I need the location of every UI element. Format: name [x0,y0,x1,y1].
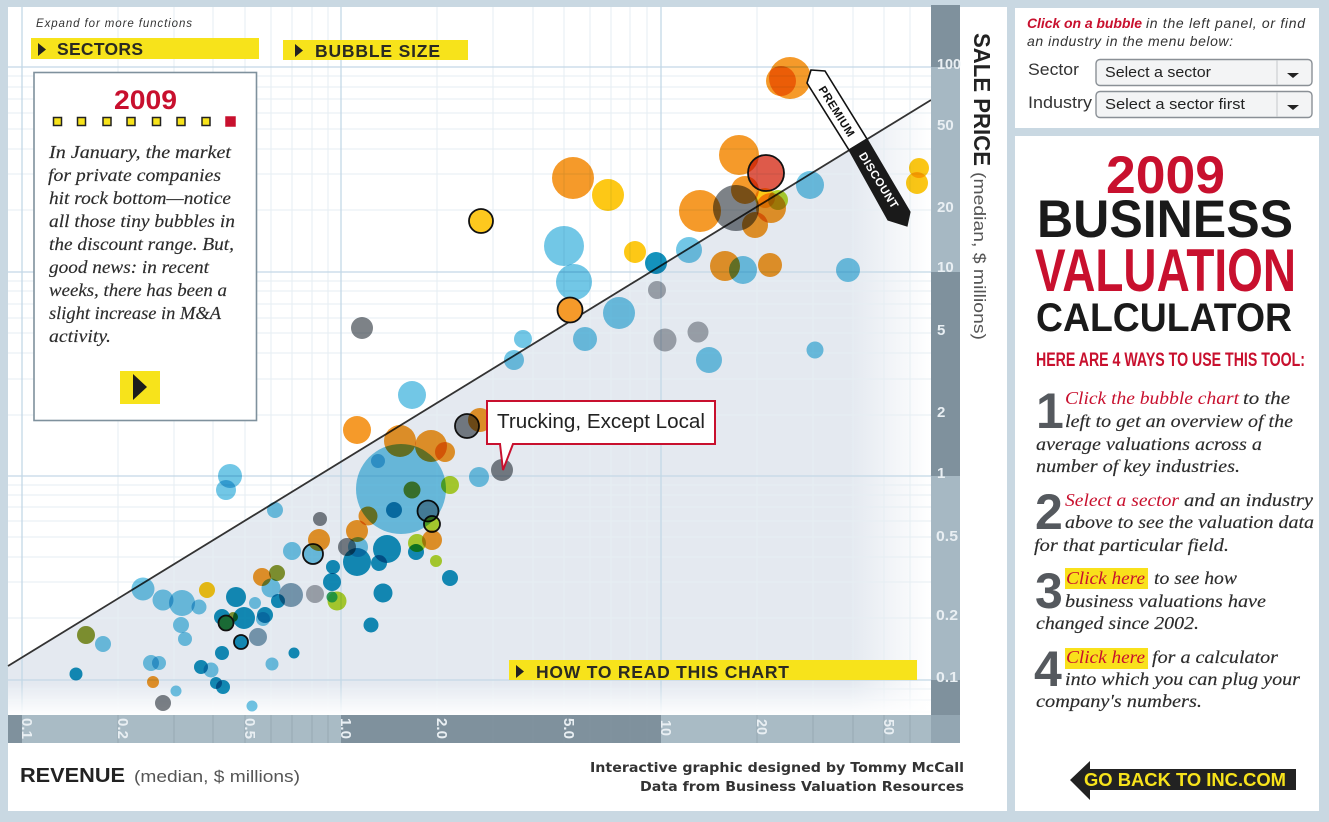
step 1: Click the bubble chart [1065,388,1240,408]
story text: hit rock bottom—notice [49,188,231,208]
vertical axis strip: sale price: 100 [937,56,961,73]
vertical axis strip: sale price: 50 [937,117,954,134]
step 4: 4 [1034,641,1062,697]
vertical axis strip: sale price: 2 [937,404,945,421]
vertical axis strip: sale price: 1 [937,465,945,482]
credits: Interactive graphic designed by Tommy McCall [590,761,964,776]
horizontal axis strip: revenue: 2.0 [433,718,450,739]
button: bubble size: BUBBLE SIZE [315,41,440,61]
finder instructions: an industry in the menu below: [1027,33,1233,49]
credits [590,761,964,795]
horizontal axis strip: revenue: 20 [753,719,770,735]
sector dropdown: Sector [1028,60,1079,79]
step 3: 3 [1035,563,1063,619]
horizontal axis strip: revenue: 5.0 [560,718,577,739]
vertical axis strip: sale price: 20 [937,199,954,216]
premium / discount divider line [8,100,931,666]
story text: weeks, there has been a [49,280,227,300]
horizontal axis strip: revenue: 1.0 [337,718,354,739]
step 2: for that particular field. [1034,535,1229,555]
step 4: Click here [1066,647,1145,667]
step 3 [1035,563,1266,633]
callout: industry tooltip [487,401,715,470]
industry dropdown: Select a sector first [1105,96,1246,113]
bubbles [70,57,929,712]
vertical axis strip: sale price [931,5,961,715]
panel: chart background [8,7,1007,811]
horizontal axis strip: revenue: 0.1 [18,718,35,739]
title: CALCULATOR [1036,296,1292,340]
step 3: Click here [1066,568,1145,588]
timeline markers [54,117,235,126]
story text: activity. [49,326,111,346]
industry dropdown: Industry [1028,93,1093,112]
vertical axis strip: sale price: 0.1 [936,669,958,686]
step 2: above to see the valuation data [1065,512,1314,532]
step 4: for a calculator [1152,647,1279,667]
step 2: 2 [1035,484,1063,540]
finder instructions [1027,15,1306,49]
story text: the discount range. But, [49,234,234,254]
story text: slight increase in M&A [49,303,222,323]
story text: all those tiny bubbles in [49,211,235,231]
vertical axis strip: sale price: 5 [937,322,945,339]
button: sectors [31,38,259,59]
panel: instructions [1015,136,1319,811]
story text: for private companies [48,165,221,185]
step 2: Select a sector [1065,490,1180,510]
title [1035,146,1296,340]
axis title: sale price [969,33,995,340]
axis title: revenue: REVENUE [20,765,125,787]
step 3: business valuations have [1065,591,1266,611]
axis title: revenue [20,765,300,787]
expand hint: Expand for more functions [36,18,192,30]
panel: year story [34,72,256,420]
story text [48,142,235,346]
next button [120,371,160,404]
button: bubble size [283,40,468,61]
step 1: number of key industries. [1036,456,1240,476]
step 4 [1034,641,1301,711]
step 3: changed since 2002. [1036,613,1199,633]
title: BUSINESS [1037,190,1293,249]
ribbon: premium / discount: DISCOUNT [856,151,900,211]
step 1: average valuations across a [1036,434,1262,454]
finder instructions: in the left panel, or find [1146,15,1306,31]
sector dropdown [1028,60,1312,86]
ribbon: premium / discount [807,70,910,226]
step 4: company's numbers. [1036,691,1202,711]
horizontal axis strip: revenue: 0.5 [241,718,258,739]
step 1: left to get an overview of the [1065,411,1293,431]
industry dropdown [1028,92,1312,118]
axis title: sale price: SALE PRICE [969,33,995,166]
horizontal axis strip: revenue [8,715,960,743]
horizontal axis strip: revenue: 0.2 [114,718,131,739]
title: 2009 [1106,146,1225,205]
axis title: revenue: (median, $ millions) [134,767,300,786]
ribbon: premium / discount: PREMIUM [816,84,856,140]
back arrow button [1070,761,1296,800]
step 1: 1 [1036,383,1064,439]
panel: scatter plot area [8,7,931,715]
button: sectors: SECTORS [57,39,143,59]
vertical axis strip: sale price: 0.2 [936,607,958,624]
button: how to read this chart: HOW TO READ THIS CHART [536,662,789,682]
discount range shading [8,100,931,715]
step 1: to the [1243,388,1290,408]
button: how to read this chart [509,660,917,682]
panel: industry finder [1015,8,1319,128]
story text: In January, the market [48,142,232,162]
axis title: sale price: (median, $ millions) [970,172,989,340]
vertical axis strip: sale price: 10 [937,259,954,276]
step 2: and an industry [1184,490,1313,510]
step 4: into which you can plug your [1065,669,1301,689]
callout: industry tooltip: Trucking, Except Local [497,411,705,433]
step 3: to see how [1154,568,1237,588]
credits: Data from Business Valuation Resources [640,780,964,795]
step 2 [1034,484,1314,555]
vertical axis strip: sale price: 0.5 [936,528,958,545]
horizontal axis strip: revenue: 10 [657,720,674,736]
step 1 [1036,383,1293,476]
back arrow button: GO BACK TO INC.COM [1084,769,1286,790]
year heading: 2009 [114,85,177,115]
horizontal axis strip: revenue: 50 [880,719,897,735]
story text: good news: in recent [49,257,210,277]
sector dropdown: Select a sector [1105,64,1211,81]
finder instructions: Click on a bubble [1027,15,1142,31]
